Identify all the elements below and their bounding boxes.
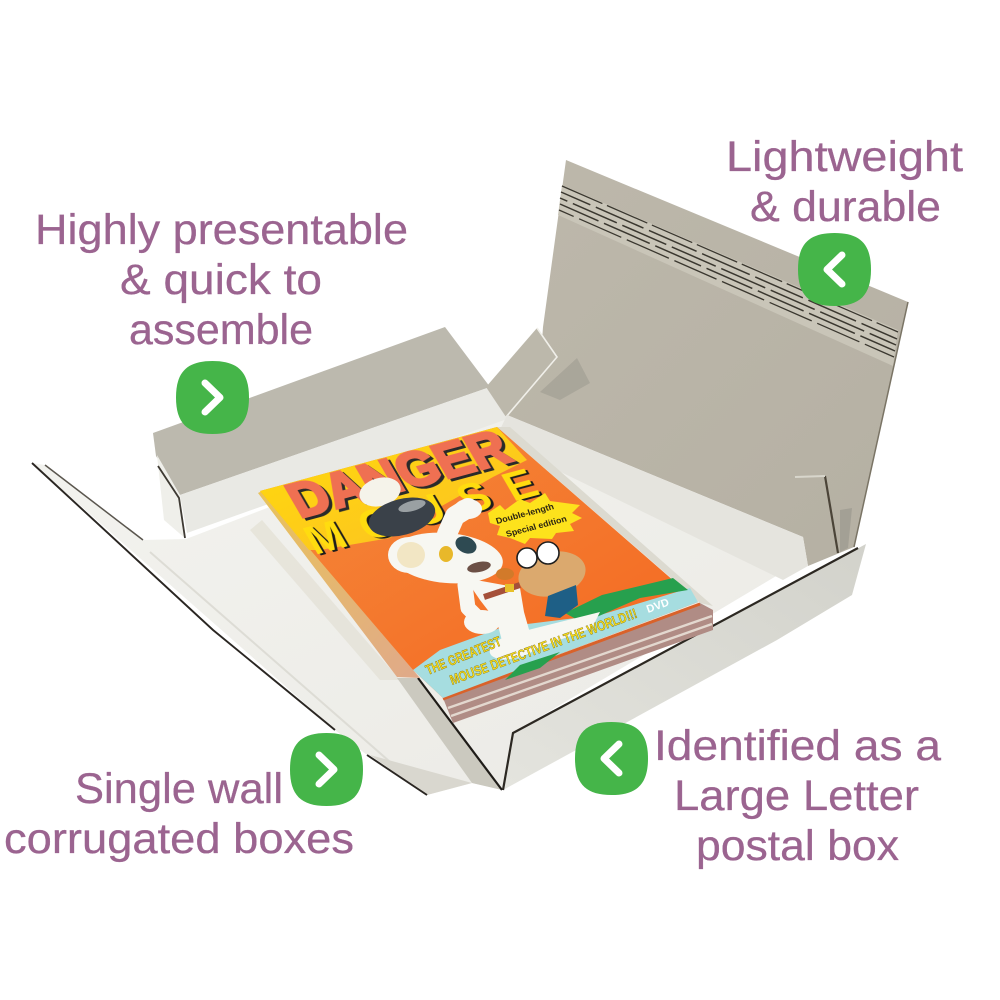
- cover tagline: THE GREATEST: [423, 633, 504, 678]
- large grey lid: [507, 160, 908, 566]
- icon: right chevron button: [290, 733, 363, 806]
- callout: presentable and quick: assemble: [129, 306, 313, 354]
- box: opened postal box with DVD: [32, 160, 908, 795]
- small corner flap: [486, 328, 590, 417]
- callout: lightweight and durable: Lightweight: [726, 133, 963, 181]
- callout: single wall corrugated: [4, 733, 363, 863]
- spine: [258, 491, 420, 678]
- disc case thickness: [443, 603, 713, 723]
- callout: large letter postal box: postal box: [696, 822, 900, 870]
- cover: [260, 427, 698, 698]
- callout: lightweight and durable: [726, 133, 963, 306]
- cover tagline: MOUSE DETECTIVE IN THE WORLD!!!: [448, 605, 639, 688]
- callout: large letter postal box: Large Letter: [674, 772, 919, 820]
- DVD logo: DVD: [645, 597, 671, 616]
- DVD case: [258, 420, 713, 723]
- right front flap: [503, 544, 866, 790]
- callout: presentable and quick: [35, 206, 408, 434]
- icon: left chevron button: [575, 722, 648, 795]
- callout: single wall corrugated: corrugated boxes: [4, 815, 354, 863]
- cover yellow title band: [260, 427, 527, 550]
- title text: DANGER: [276, 420, 520, 527]
- starburst with text: [488, 493, 582, 544]
- title text lower: MOUSE: [295, 460, 547, 564]
- Penfold character: [514, 542, 590, 618]
- callout: single wall corrugated: Single wall: [75, 765, 283, 813]
- callout: lightweight and durable: & durable: [750, 183, 941, 231]
- bottom folded band: [397, 678, 502, 790]
- starburst with text: Double-length: [495, 501, 555, 526]
- green hills: [505, 578, 688, 680]
- bottom blue band: [413, 588, 698, 698]
- callout: large letter postal box: Identified as a: [654, 722, 941, 770]
- box floor and left flap: [32, 415, 803, 795]
- bomb and clock: [356, 473, 440, 543]
- Danger Mouse character: [388, 499, 600, 664]
- right inner strip: [495, 415, 808, 580]
- starburst with text: Special edition: [505, 514, 568, 539]
- callout: presentable and quick: Highly presentable: [35, 206, 408, 254]
- cover tagline: [423, 605, 639, 688]
- callout: presentable and quick: & quick to: [120, 256, 322, 304]
- callout: large letter postal box: [575, 722, 941, 870]
- icon: right chevron button: [176, 361, 249, 434]
- left back wall: [153, 327, 510, 539]
- clear case edge: [497, 427, 713, 606]
- icon: left chevron button: [798, 233, 871, 306]
